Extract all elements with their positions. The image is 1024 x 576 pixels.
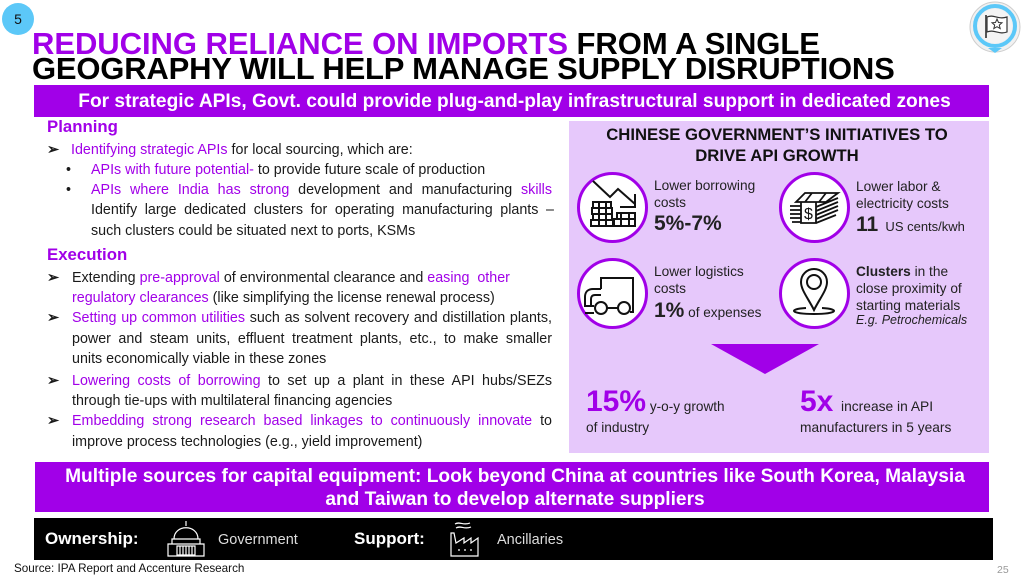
- planning list: [47, 142, 554, 239]
- execution list: regulatory clearances (like simplifying the license renewal process): [72, 290, 495, 306]
- icon: falling coins: [577, 172, 648, 243]
- banner: strategic APIs: [34, 85, 989, 117]
- label and value: [856, 179, 949, 211]
- banner: capital equipment: [35, 462, 989, 512]
- item: lower logistics costs: 1% of expenses: [654, 299, 761, 322]
- title: [32, 26, 895, 86]
- badge: section number: [2, 3, 34, 35]
- execution list: units economically viable in these zones: [72, 351, 326, 367]
- item: clusters: [779, 258, 967, 329]
- banner: strategic APIs: For strategic APIs, Govt. could provide plug-and-play infrastructural support in dedicated zones: [78, 91, 951, 112]
- title: GEOGRAPHY WILL HELP MANAGE SUPPLY DISRUPTIONS: [32, 51, 895, 86]
- government label: Government: [218, 532, 298, 548]
- stat: industry growth: [586, 385, 725, 435]
- execution list: ➢: [47, 270, 59, 286]
- icon: stack of money: $: [804, 206, 813, 223]
- example text: E.g. Petrochemicals: [856, 313, 967, 327]
- panel heading: [606, 125, 948, 165]
- stat: API manufacturers: [800, 385, 951, 435]
- planning list: such clusters could be situated next to ports, KSMs: [91, 223, 415, 239]
- support label: Support:: [354, 529, 425, 548]
- source note: Source: IPA Report and Accenture Research: [14, 562, 244, 575]
- execution list: Setting up common utilities such as solvent recovery and distillation plants,: [72, 310, 552, 326]
- title: REDUCING RELIANCE ON IMPORTS FROM A SINGLE: [32, 26, 820, 61]
- planning list: ➢: [47, 142, 59, 158]
- panel heading: DRIVE API GROWTH: [695, 146, 859, 165]
- execution list: ➢: [47, 310, 59, 326]
- banner: capital equipment: Multiple sources for capital equipment: Look beyond China at countries like South Korea, Malaysia: [65, 466, 965, 487]
- planning list: Identifying strategic APIs for local sourcing, which are:: [71, 142, 413, 158]
- page number: 25: [997, 564, 1009, 576]
- label and value: [654, 178, 755, 210]
- stat: industry growth: 15% y-o-y growth: [586, 385, 725, 418]
- label: close proximity of: [856, 281, 962, 296]
- ancillaries label: Ancillaries: [497, 532, 563, 548]
- panel heading: CHINESE GOVERNMENT’S INITIATIVES TO: [606, 125, 948, 144]
- label and value: costs: [654, 195, 686, 210]
- item: lower labor and electricity costs: 11 US cents/kwh: [856, 213, 965, 236]
- execution list: [47, 270, 552, 450]
- bar: ownership and support: [34, 518, 993, 560]
- heading: execution: Execution: [47, 245, 127, 264]
- execution list: Extending pre-approval of environmental clearance and easing other: [72, 270, 510, 286]
- stat: API manufacturers: 5x increase in API: [800, 385, 933, 418]
- label and value: Lower labor &: [856, 179, 940, 194]
- execution list: Lowering costs of borrowing to set up a plant in these API hubs/SEZs: [72, 373, 552, 389]
- banner: capital equipment: and Taiwan to develop alternate suppliers: [325, 489, 705, 510]
- icon: map pin: [779, 258, 850, 329]
- item: lower labor and electricity costs: [779, 172, 965, 243]
- execution list: ➢: [47, 413, 59, 429]
- execution list: Embedding strong research based linkages to continuously innovate to: [72, 413, 552, 429]
- label and value: Lower borrowing: [654, 178, 755, 193]
- arrow: down triangle: [711, 344, 819, 374]
- label and value: Lower logistics: [654, 264, 744, 279]
- panel: Chinese government initiatives: [569, 121, 989, 453]
- planning list: Identify large dedicated clusters for operating manufacturing plants –: [91, 202, 554, 218]
- item: lower logistics costs: [577, 258, 761, 329]
- execution list: power and steam units, effluent treatment plants, etc., to make smaller: [72, 331, 552, 347]
- label: [856, 264, 962, 313]
- planning list: •: [66, 162, 71, 178]
- execution list: through tie-ups with multilateral financing agencies: [72, 393, 392, 409]
- icon: government building: [167, 521, 205, 557]
- icon: stack of money: [779, 172, 850, 243]
- stat: industry growth: of industry: [586, 420, 649, 435]
- planning list: APIs with future potential- to provide future scale of production: [91, 162, 485, 178]
- ownership label: Ownership:: [45, 529, 139, 548]
- execution list: improve process technologies (e.g., yield improvement): [72, 434, 422, 450]
- panel: planning and execution text: [47, 117, 554, 450]
- planning list: •: [66, 182, 71, 198]
- icon: truck: [577, 258, 648, 329]
- item: lower borrowing costs: [577, 172, 755, 243]
- stat: API manufacturers: manufacturers in 5 years: [800, 420, 951, 435]
- label and value: electricity costs: [856, 196, 949, 211]
- icon: flag badge: [970, 2, 1020, 53]
- icon: factory: [450, 522, 479, 557]
- label and value: [654, 264, 744, 296]
- item: lower borrowing costs: 5%-7%: [654, 212, 722, 235]
- label: starting materials: [856, 298, 960, 313]
- heading: planning: Planning: [47, 117, 118, 136]
- execution list: ➢: [47, 373, 59, 389]
- label and value: costs: [654, 281, 686, 296]
- badge: section number: 5: [14, 11, 22, 27]
- label: Clusters in the: [856, 264, 948, 279]
- planning list: APIs where India has strong development and manufacturing skills: [91, 182, 552, 198]
